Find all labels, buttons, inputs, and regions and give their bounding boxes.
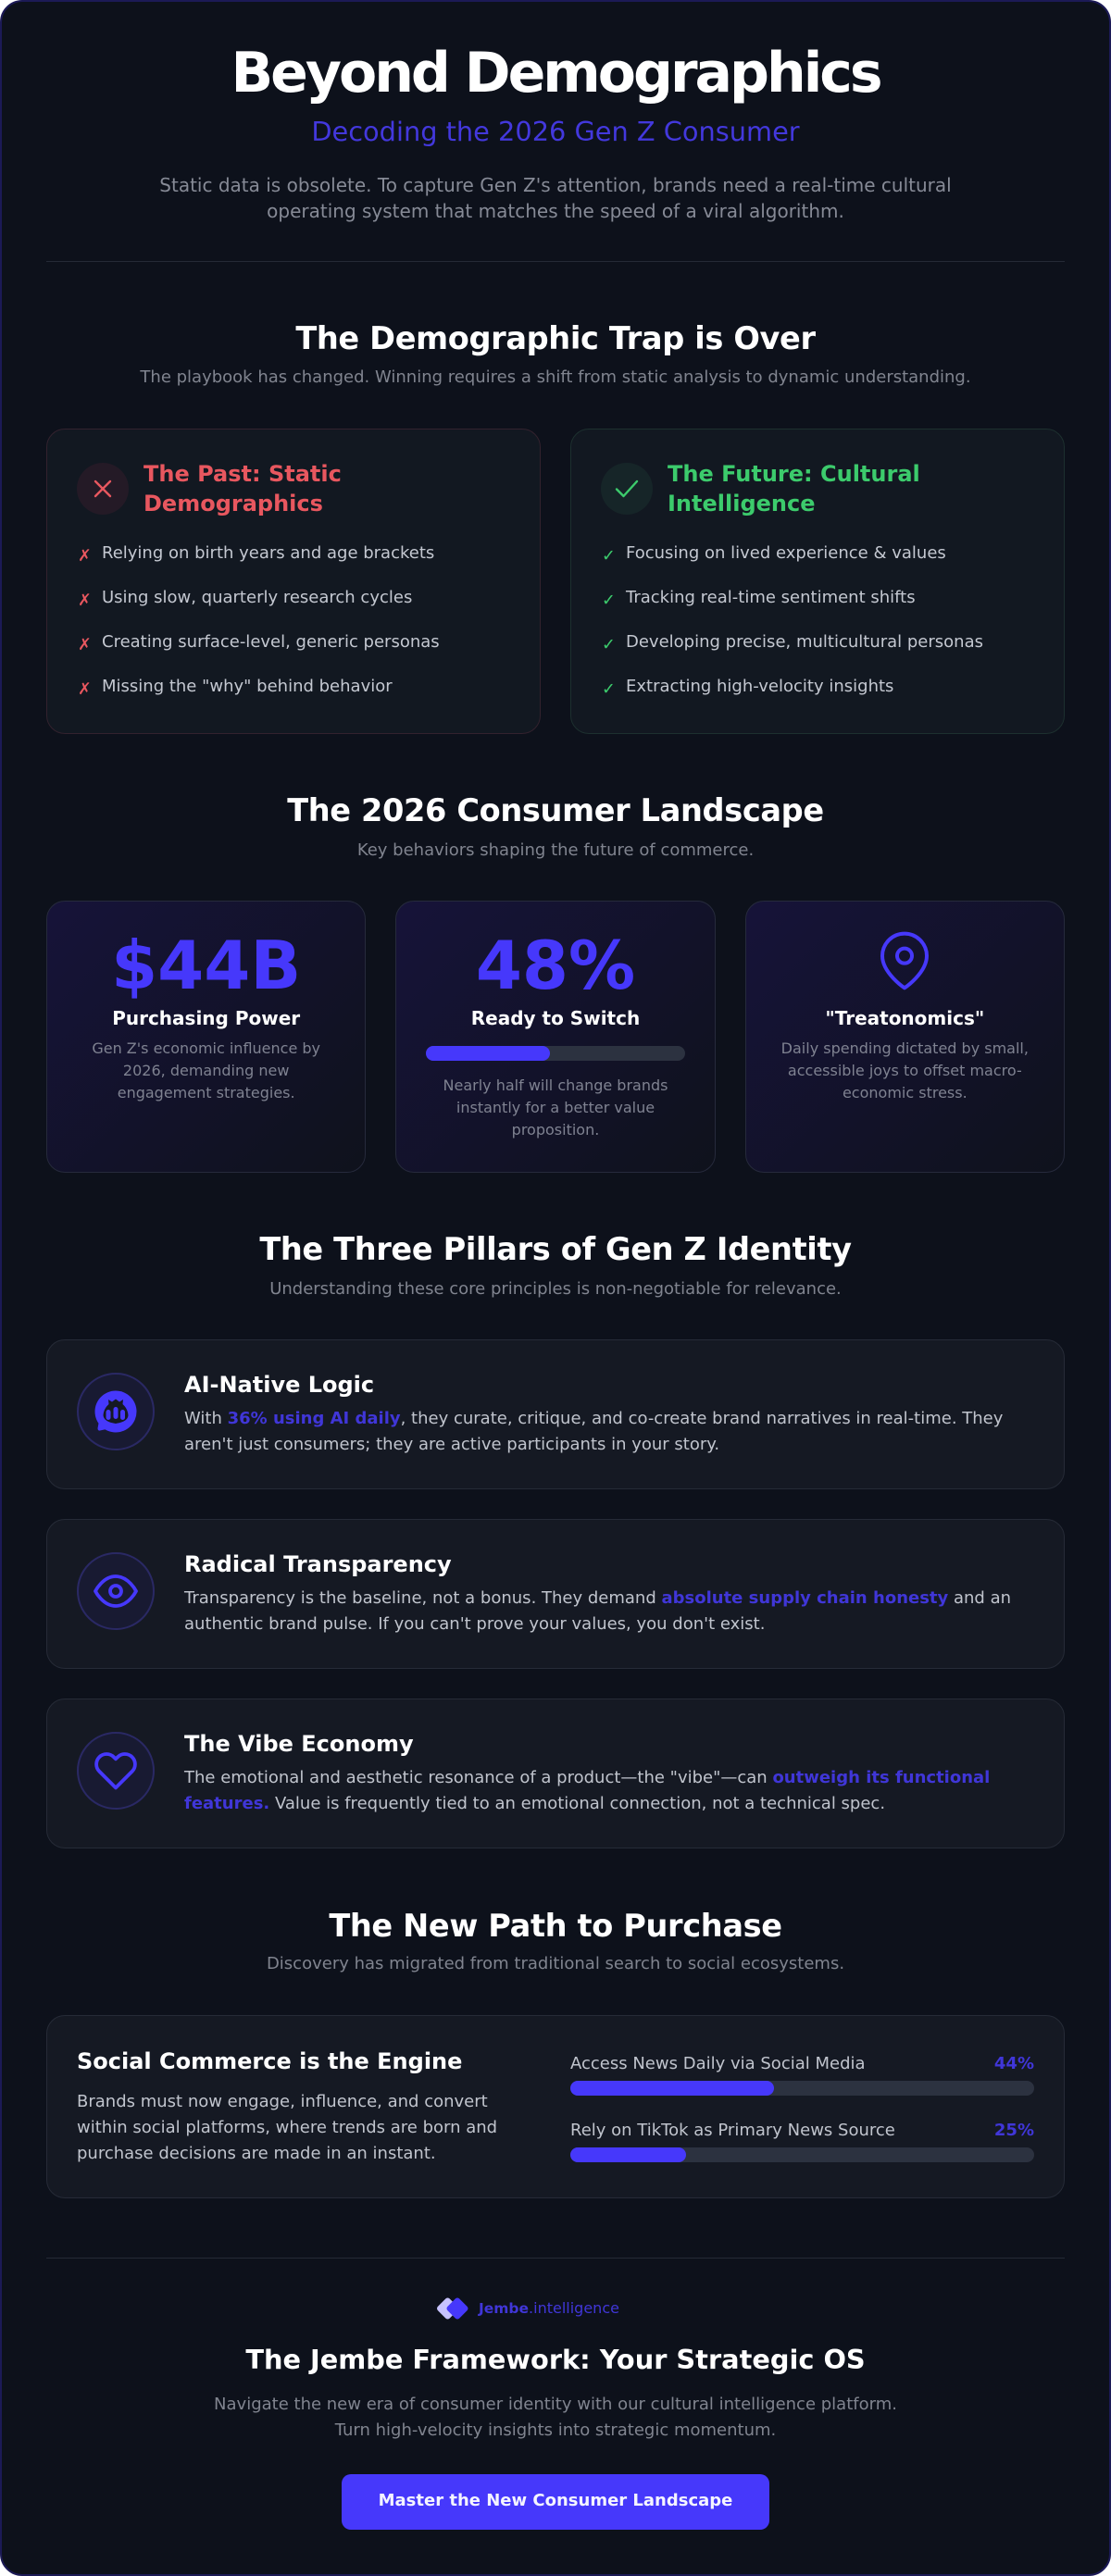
section heading: three pillars (259, 1231, 852, 1299)
item: Missing the "why" behind behavior (102, 677, 393, 696)
marker: ✗ (78, 636, 92, 654)
progress bar (426, 1046, 685, 1061)
title: Beyond Demographics (231, 41, 880, 106)
list (602, 543, 983, 699)
body (183, 1588, 1011, 1634)
subheading: The playbook has changed. Winning requires a shift from static analysis to dynamic understanding. (140, 367, 971, 387)
description: Nearly half will change brands (443, 1076, 668, 1094)
intro text (159, 174, 952, 222)
logo text: Jembe.intelligence (479, 2299, 619, 2317)
description: proposition. (512, 1121, 599, 1139)
header (159, 41, 952, 222)
heading: Social Commerce is the Engine (77, 2048, 462, 2074)
marker: ✗ (78, 547, 92, 566)
logo (437, 2297, 619, 2320)
bar value: 25% (994, 2121, 1034, 2140)
marker: ✓ (602, 547, 616, 566)
number: 48% (476, 927, 635, 1004)
title: AI-Native Logic (184, 1372, 374, 1398)
body: Transparency is the baseline, not a bonus. They demand absolute supply chain honesty and an (184, 1588, 1011, 1608)
title: Radical Transparency (184, 1551, 452, 1577)
title: The Vibe Economy (184, 1731, 414, 1757)
bar label: Access News Daily via Social Media (570, 2054, 866, 2073)
stat card: purchasing power (46, 901, 366, 1173)
button: Master the New Consumer Landscape (379, 2491, 732, 2510)
description: accessible joys to offset macro- (788, 1062, 1022, 1079)
description: instantly for a better value (456, 1099, 655, 1116)
item: Using slow, quarterly research cycles (102, 588, 412, 607)
button (342, 2474, 769, 2530)
list (78, 543, 440, 699)
intro text: operating system that matches the speed of a viral algorithm. (267, 200, 844, 222)
text: Turn high-velocity insights into strategic momentum. (335, 2420, 776, 2440)
item: Relying on birth years and age brackets (102, 543, 434, 563)
logo mark (437, 2297, 468, 2320)
panel: the past (46, 429, 541, 734)
description (92, 1039, 320, 1101)
heading: The Past: Static (144, 461, 342, 487)
item: Extracting high-velocity insights (626, 677, 893, 696)
item: Creating surface-level, generic personas (102, 632, 440, 652)
stat card: treatonomics (745, 901, 1065, 1173)
stat card: ready to switch (395, 901, 716, 1173)
description: 2026, demanding new (123, 1062, 289, 1079)
description (781, 1039, 1029, 1101)
heading: The 2026 Consumer Landscape (287, 792, 824, 828)
footer (214, 2297, 897, 2530)
heading: The Demographic Trap is Over (295, 320, 816, 356)
marker: ✗ (78, 591, 92, 610)
body: The emotional and aesthetic resonance of a product—the "vibe"—can outweigh its functional (184, 1768, 990, 1787)
label: Purchasing Power (112, 1007, 300, 1029)
text: Navigate the new era of consumer identity with our cultural intelligence platform. (214, 2395, 897, 2414)
marker: ✓ (602, 636, 616, 654)
body: authentic brand pulse. If you can't prove your values, you don't exist. (184, 1614, 765, 1634)
heading: The Future: Cultural (668, 461, 920, 487)
body: purchase decisions are made in an instant. (77, 2144, 436, 2163)
label: "Treatonomics" (825, 1007, 984, 1029)
marker: ✗ (78, 680, 92, 699)
bar chart (570, 2054, 1034, 2162)
item: Tracking real-time sentiment shifts (626, 588, 916, 607)
bar (570, 2147, 1034, 2162)
section heading: consumer landscape (287, 792, 824, 860)
subheading: Understanding these core principles is non-negotiable for relevance. (269, 1279, 842, 1299)
description: engagement strategies. (118, 1084, 295, 1101)
intro text: Static data is obsolete. To capture Gen Z's attention, brands need a real-time cultural (159, 174, 952, 196)
icon: map pin (880, 931, 929, 990)
icon: eye (77, 1552, 155, 1630)
subheading: Discovery has migrated from traditional search to social ecosystems. (267, 1954, 844, 1973)
pillar: AI-native logic (46, 1339, 1065, 1489)
body (184, 1409, 1003, 1454)
body: With 36% using AI daily, they curate, critique, and co-create brand narratives in real-time. They (184, 1409, 1003, 1428)
body (183, 1768, 990, 1813)
icon: check (601, 463, 653, 515)
body: Brands must now engage, influence, and convert (77, 2092, 488, 2111)
bar label: Rely on TikTok as Primary News Source (570, 2121, 895, 2140)
heading: Demographics (144, 491, 323, 516)
body (77, 2092, 497, 2163)
marker: ✓ (602, 680, 616, 699)
description: economic stress. (843, 1084, 967, 1101)
section heading: path to purchase (267, 1908, 844, 1973)
subheading: Key behaviors shaping the future of commerce. (357, 840, 754, 860)
number: $44B (111, 927, 301, 1004)
icon: heart (77, 1732, 155, 1810)
description: Gen Z's economic influence by (92, 1039, 320, 1057)
heading: The New Path to Purchase (329, 1908, 782, 1944)
description (443, 1076, 668, 1139)
body: aren't just consumers; they are active participants in your story. (184, 1435, 719, 1454)
heading: Intelligence (668, 491, 815, 516)
bar (570, 2081, 1034, 2096)
description: Daily spending dictated by small, (781, 1039, 1029, 1057)
label: Ready to Switch (471, 1007, 640, 1029)
item: Developing precise, multicultural personas (626, 632, 983, 652)
text (214, 2395, 897, 2440)
item: Focusing on lived experience & values (626, 543, 946, 563)
heading: The Three Pillars of Gen Z Identity (259, 1231, 852, 1267)
pillar: radical transparency (46, 1519, 1065, 1669)
marker: ✓ (602, 591, 616, 610)
heading: The Jembe Framework: Your Strategic OS (245, 2344, 866, 2375)
heading (144, 461, 342, 516)
body: features. Value is frequently tied to an emotional connection, not a technical spec. (184, 1794, 885, 1813)
body: within social platforms, where trends are born and (77, 2118, 497, 2137)
bar value: 44% (994, 2054, 1034, 2073)
icon: x (77, 463, 129, 515)
panel: the future (570, 429, 1065, 734)
section heading: demographic trap (140, 320, 971, 387)
pillar: vibe economy (46, 1699, 1065, 1848)
icon: AI chat (77, 1373, 155, 1450)
heading (668, 461, 920, 516)
subtitle: Decoding the 2026 Gen Z Consumer (311, 116, 800, 147)
panel: social commerce (46, 2015, 1065, 2198)
